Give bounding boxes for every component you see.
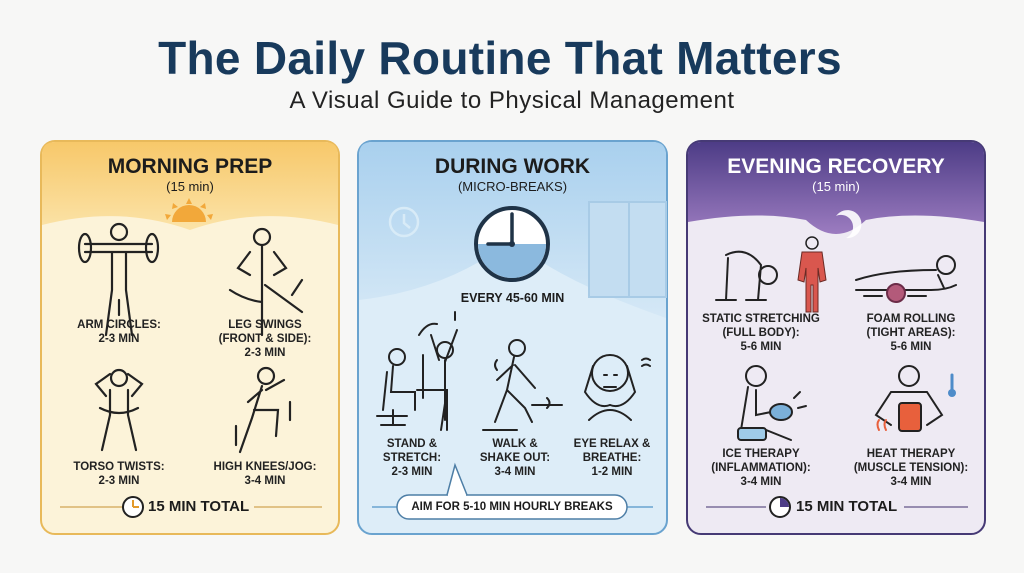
panel: evening recovery <box>686 140 986 535</box>
text: labels: STAND & <box>387 438 437 450</box>
panel: during work: 1-2 MIN <box>592 466 632 478</box>
panel: evening recovery: FOAM ROLLING <box>867 313 955 325</box>
icon: muscle figure <box>798 237 826 312</box>
panel: during work: AIM FOR 5-10 MIN HOURLY BREAKS <box>411 501 613 513</box>
panel: evening recovery: (INFLAMMATION): <box>711 462 811 474</box>
panel: evening recovery: 3-4 MIN <box>891 476 931 488</box>
panel: during work: SHAKE OUT: <box>480 452 550 464</box>
panel: during work: 3-4 MIN <box>495 466 535 478</box>
icon: high knees <box>236 368 290 452</box>
icon: moon <box>836 210 861 238</box>
panel: during work: EYE RELAX & <box>574 438 650 450</box>
text: labels: 5-6 MIN <box>741 341 781 353</box>
text: header: EVENING RECOVERY <box>727 155 945 178</box>
footer line <box>706 506 968 508</box>
panel: morning prep: (FRONT & SIDE): <box>219 333 311 345</box>
text: header: DURING WORK <box>435 155 590 178</box>
text: header: MORNING PREP <box>108 155 272 178</box>
icon: arm circles <box>79 224 158 335</box>
text: labels: STRETCH: <box>383 452 441 464</box>
total: 15 MIN TOTAL <box>148 498 249 515</box>
text: labels <box>383 438 441 478</box>
panel: during work: (MICRO-BREAKS) <box>458 179 567 194</box>
panel: during work <box>357 140 668 535</box>
icon: walk <box>483 340 562 430</box>
panel: evening recovery: HEAT THERAPY <box>867 448 955 460</box>
footer line <box>60 506 322 508</box>
icon: eye relax <box>585 355 650 420</box>
panel: during work: BREATHE: <box>583 452 641 464</box>
icon: clock <box>476 208 548 280</box>
text: labels: STATIC STRETCHING <box>702 313 820 325</box>
icon: small clock <box>390 208 418 236</box>
panel: morning prep: 3-4 MIN <box>245 475 285 487</box>
panel: morning prep <box>40 140 340 535</box>
text: labels: (FULL BODY): <box>722 327 800 339</box>
panel: evening recovery: (TIGHT AREAS): <box>866 327 956 339</box>
icon: sun <box>165 198 213 222</box>
panel: evening recovery: (15 min) <box>812 179 860 194</box>
icon: foam rolling <box>856 256 956 302</box>
icon: heat therapy <box>876 366 956 431</box>
icon: ice therapy <box>738 366 806 440</box>
panel: morning prep: HIGH KNEES/JOG: <box>214 461 316 473</box>
icon: torso twists <box>96 370 142 450</box>
panel: morning prep: (15 min) <box>166 179 214 194</box>
text: labels: 2-3 MIN <box>99 333 139 345</box>
text: labels <box>77 319 161 345</box>
panel: during work: EVERY 45-60 MIN <box>461 291 564 305</box>
callout <box>372 465 653 519</box>
panel: evening recovery: 3-4 MIN <box>741 476 781 488</box>
title: The Daily Routine That Matters <box>158 32 842 84</box>
icon: static stretching <box>716 252 777 300</box>
panel: evening recovery: (MUSCLE TENSION): <box>854 462 968 474</box>
icon: window <box>589 202 666 297</box>
panel: morning prep: LEG SWINGS <box>228 319 302 331</box>
subtitle: A Visual Guide to Physical Management <box>290 87 734 114</box>
text: labels <box>702 313 820 353</box>
icon: leg swings <box>230 229 302 335</box>
panel: morning prep: TORSO TWISTS: <box>73 461 165 473</box>
panel: evening recovery: ICE THERAPY <box>722 448 800 460</box>
text: labels: ARM CIRCLES: <box>77 319 161 331</box>
text: labels: 2-3 MIN <box>392 466 432 478</box>
total: 15 MIN TOTAL <box>796 498 897 515</box>
icon: stand and stretch <box>377 312 457 430</box>
panel: during work: WALK & <box>492 438 538 450</box>
panel: evening recovery: 5-6 MIN <box>891 341 931 353</box>
panel: morning prep: 2-3 MIN <box>99 475 139 487</box>
panel: morning prep: 2-3 MIN <box>245 347 285 359</box>
